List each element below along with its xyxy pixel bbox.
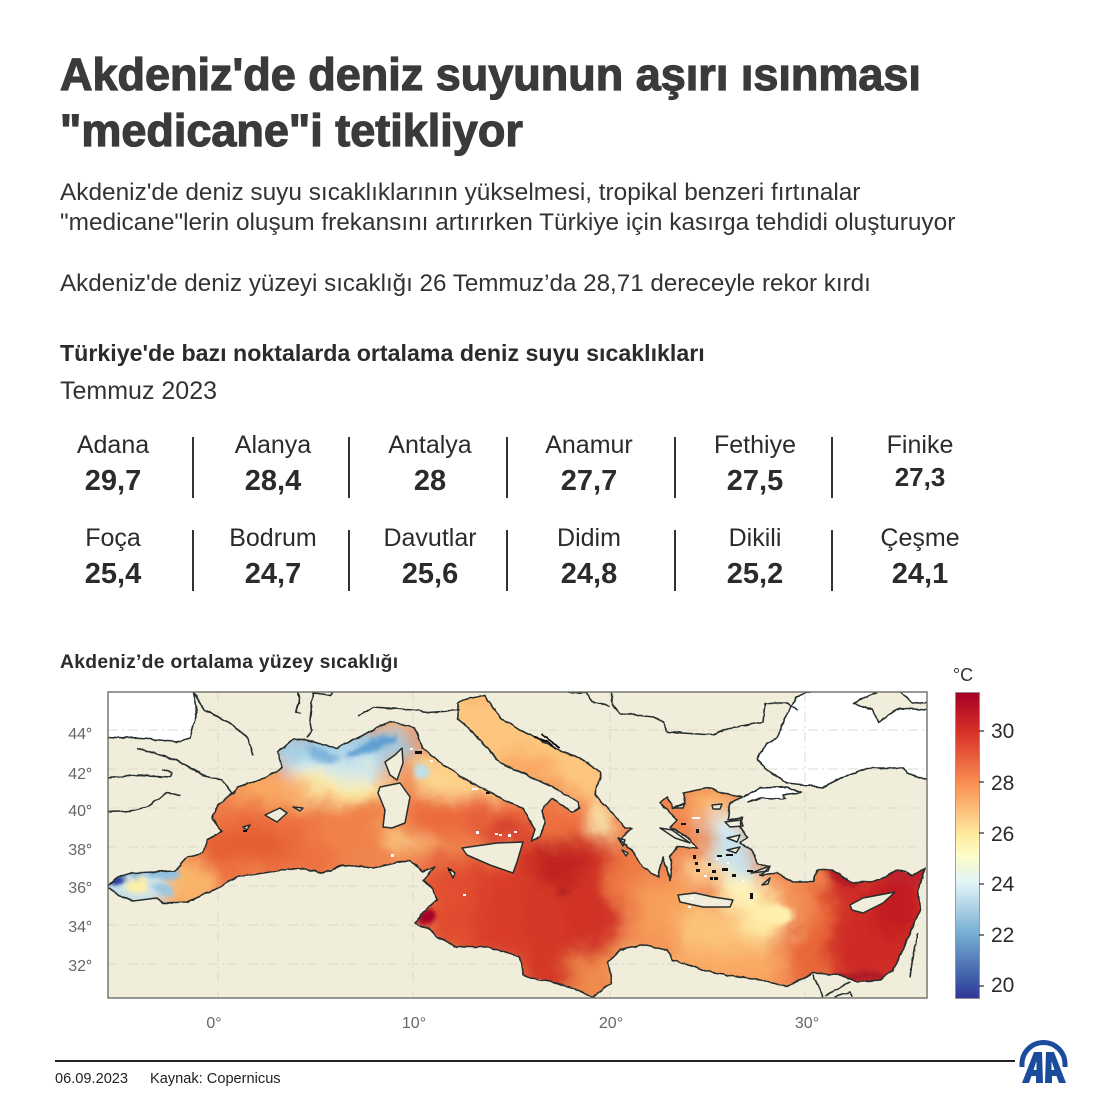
intro text: Akdeniz'de deniz suyu sıcaklıklarının yükselmesi, tropikal benzeri fırtınalar xyxy=(60,179,860,206)
colorbar xyxy=(956,692,1015,998)
colorbar: 30 xyxy=(991,720,1014,743)
city: Adana xyxy=(77,431,150,497)
city: Bodrum: 24,7 xyxy=(245,558,301,590)
latitude labels: 38 xyxy=(68,842,86,859)
latitude labels: 44 xyxy=(68,726,86,743)
temperature table xyxy=(77,431,960,591)
city: Bodrum: Bodrum xyxy=(229,524,317,552)
white coastal specks xyxy=(391,748,744,908)
city: Çeşme: 24,1 xyxy=(892,558,948,590)
city: Davutlar: Davutlar xyxy=(383,524,477,552)
source: Kaynak: Copernicus xyxy=(150,1071,281,1087)
city: Dikili xyxy=(727,524,783,590)
longitude labels: 20° xyxy=(599,1015,623,1032)
small Aegean islands xyxy=(243,751,753,899)
city: Finike: 27,3 xyxy=(895,462,945,492)
colorbar unit: °C xyxy=(953,665,973,685)
colorbar: 22 xyxy=(991,924,1014,947)
city: Foça: Foça xyxy=(85,524,141,552)
city: Alanya: Alanya xyxy=(235,431,311,459)
city: Davutlar: 25,6 xyxy=(402,558,458,590)
city: Anamur xyxy=(545,431,633,497)
city: Antalya: Antalya xyxy=(388,431,472,459)
city: Alanya xyxy=(234,431,312,497)
city: Fethiye: 27,5 xyxy=(727,465,783,497)
city: Fethiye: Fethiye xyxy=(714,431,796,459)
longitude labels: 10° xyxy=(402,1015,426,1032)
colorbar: 20 xyxy=(991,974,1014,997)
city: Bodrum xyxy=(229,524,317,590)
city: Finike xyxy=(887,431,953,492)
title xyxy=(60,49,921,156)
city: Anamur: 27,7 xyxy=(561,465,617,497)
longitude labels xyxy=(206,1015,819,1032)
longitude labels: 0° xyxy=(206,1015,222,1032)
colorbar: 26 xyxy=(991,823,1014,846)
city: Dikili: 25,2 xyxy=(727,558,783,590)
city: Anamur: Anamur xyxy=(545,431,633,459)
logo: AA xyxy=(1020,1040,1068,1083)
city: Alanya: 28,4 xyxy=(245,465,301,497)
map heading: Akdeniz’de ortalama yüzey sıcaklığı xyxy=(60,652,398,673)
latitude labels: 42 xyxy=(68,766,86,783)
latitude degree signs xyxy=(87,728,91,964)
white unmapped seas xyxy=(107,692,927,802)
city: Antalya xyxy=(388,431,472,497)
latitude labels: 40 xyxy=(68,803,86,820)
city: Didim xyxy=(557,524,621,590)
title: "medicane"i tetikliyor xyxy=(60,105,523,156)
colorbar: 24 xyxy=(991,873,1015,896)
city: Davutlar xyxy=(383,524,477,590)
map land background xyxy=(108,692,927,998)
latitude labels: 36 xyxy=(68,880,86,897)
footer rule xyxy=(55,1060,1015,1062)
latitude labels: 34 xyxy=(68,919,86,936)
intro text xyxy=(60,179,955,236)
city: Foça: 25,4 xyxy=(85,558,141,590)
sea surface temperature map xyxy=(68,668,1014,1028)
coastline xyxy=(107,692,927,997)
sharp temperature features xyxy=(110,735,930,982)
colorbar: 28 xyxy=(991,772,1014,795)
record temperature note: Akdeniz'de deniz yüzeyi sıcaklığı 26 Temmuz’da 28,71 dereceyle rekor kırdı xyxy=(60,270,871,297)
grid lines xyxy=(108,692,927,998)
map frame xyxy=(108,692,927,998)
city: Adana: Adana xyxy=(77,431,149,459)
city: Dikili: Dikili xyxy=(729,524,781,552)
date: 06.09.2023 xyxy=(55,1071,128,1087)
city: Çeşme xyxy=(880,524,960,590)
intro text: "medicane"lerin oluşum frekansını artırırken Türkiye için kasırga tehdidi oluşturuyor xyxy=(60,209,955,236)
temperature field xyxy=(90,690,930,1000)
city: Foça xyxy=(85,524,142,590)
table date: Temmuz 2023 xyxy=(60,377,217,405)
city: Adana: 29,7 xyxy=(85,465,141,497)
city: Antalya: 28 xyxy=(414,465,446,497)
city: Didim: Didim xyxy=(557,524,621,552)
city: Çeşme: Çeşme xyxy=(880,524,960,552)
city: Didim: 24,8 xyxy=(561,558,617,590)
title: Akdeniz'de deniz suyunun aşırı ısınması xyxy=(60,49,921,100)
latitude labels: 32 xyxy=(68,958,86,975)
table heading: Türkiye'de bazı noktalarda ortalama deniz suyu sıcaklıkları xyxy=(60,340,705,366)
city: Finike: Finike xyxy=(887,431,953,459)
city: Fethiye xyxy=(714,431,796,497)
longitude labels: 30° xyxy=(795,1015,819,1032)
islands xyxy=(243,748,895,913)
latitude labels xyxy=(68,726,86,975)
